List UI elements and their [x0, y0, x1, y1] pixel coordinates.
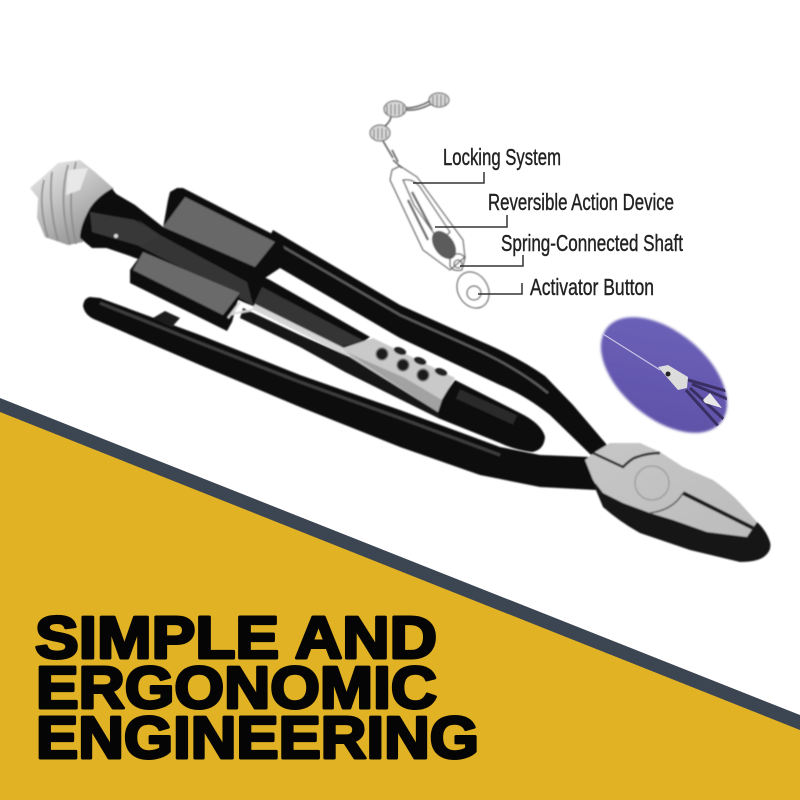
plier head black underside — [593, 483, 770, 562]
plier head silver face — [585, 443, 757, 537]
exploded parts diagram — [370, 93, 495, 314]
wire twister pliers — [30, 160, 770, 562]
diagram labels: Reversible Action Device — [488, 189, 674, 215]
title: SIMPLE AND — [35, 605, 437, 671]
wire knots — [370, 93, 449, 158]
upper bracket — [163, 188, 285, 282]
shaft tip — [438, 380, 545, 452]
lower handle — [83, 297, 596, 490]
diagram labels: Activator Button — [530, 274, 654, 300]
diagram labels: Locking System — [443, 144, 561, 170]
diagram labels: Spring-Connected Shaft — [501, 230, 683, 256]
knurled knob — [30, 160, 160, 258]
leader lines — [413, 172, 523, 294]
title: ENGINEERING — [36, 705, 479, 771]
central shaft — [83, 192, 545, 452]
upper handle — [250, 230, 607, 456]
diagram labels — [443, 144, 683, 300]
activator button — [451, 266, 495, 314]
silver perforated sleeve — [343, 338, 455, 412]
title — [35, 605, 479, 771]
lower bracket — [130, 252, 252, 331]
purple inset photo — [599, 315, 729, 435]
title: ERGONOMIC — [36, 655, 437, 721]
yellow panel — [0, 412, 800, 800]
tool body outline — [390, 150, 465, 270]
dark diagonal band — [0, 398, 800, 800]
